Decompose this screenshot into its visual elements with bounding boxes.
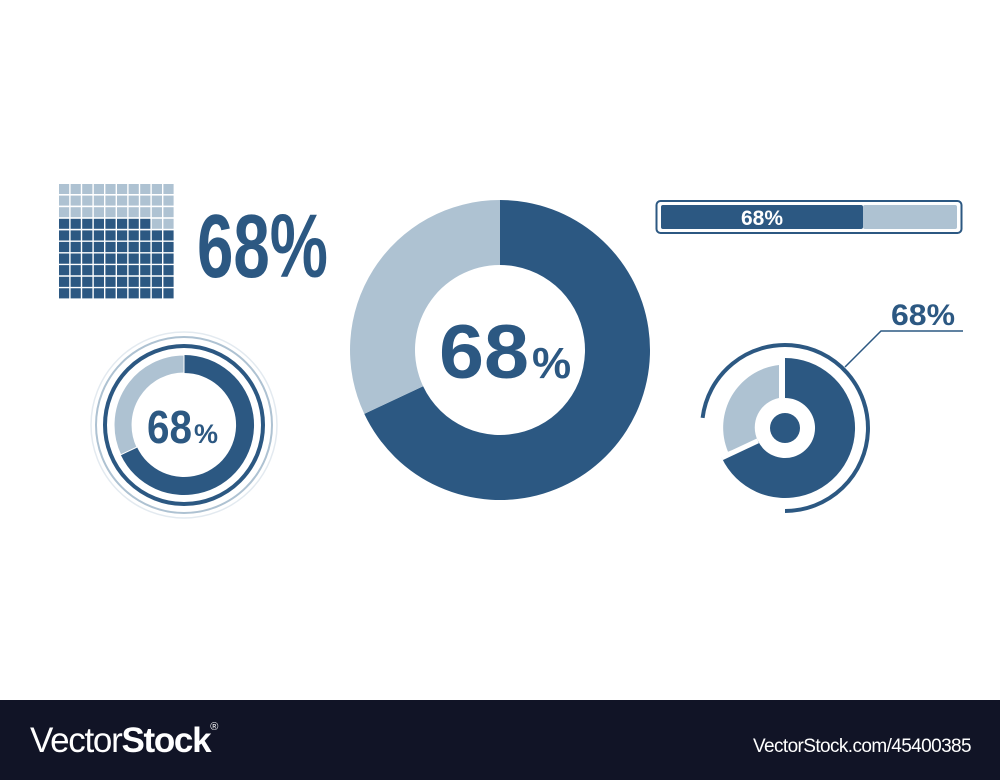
big donut label: 68: [439, 310, 529, 395]
callout label: 68%: [891, 299, 955, 332]
callout line: [845, 331, 963, 367]
right pie with callout: [703, 299, 963, 511]
big donut chart: [350, 200, 650, 500]
big donut label: %: [532, 339, 571, 388]
footer url: VectorStock.com/45400385: [753, 736, 971, 757]
progress bar: [656, 201, 962, 233]
small ringed donut: [91, 332, 277, 518]
waffle grid 68 of 100: [58, 184, 175, 299]
footer bar: [0, 700, 1000, 780]
small donut label: %: [194, 419, 218, 449]
small donut label: 68: [147, 401, 192, 453]
footer logo: ®: [210, 721, 218, 733]
progress label: 68%: [741, 207, 783, 230]
waffle label 68%: 68%: [197, 197, 328, 297]
footer logo: VectorStock: [30, 721, 210, 760]
big donut label: [439, 310, 571, 395]
